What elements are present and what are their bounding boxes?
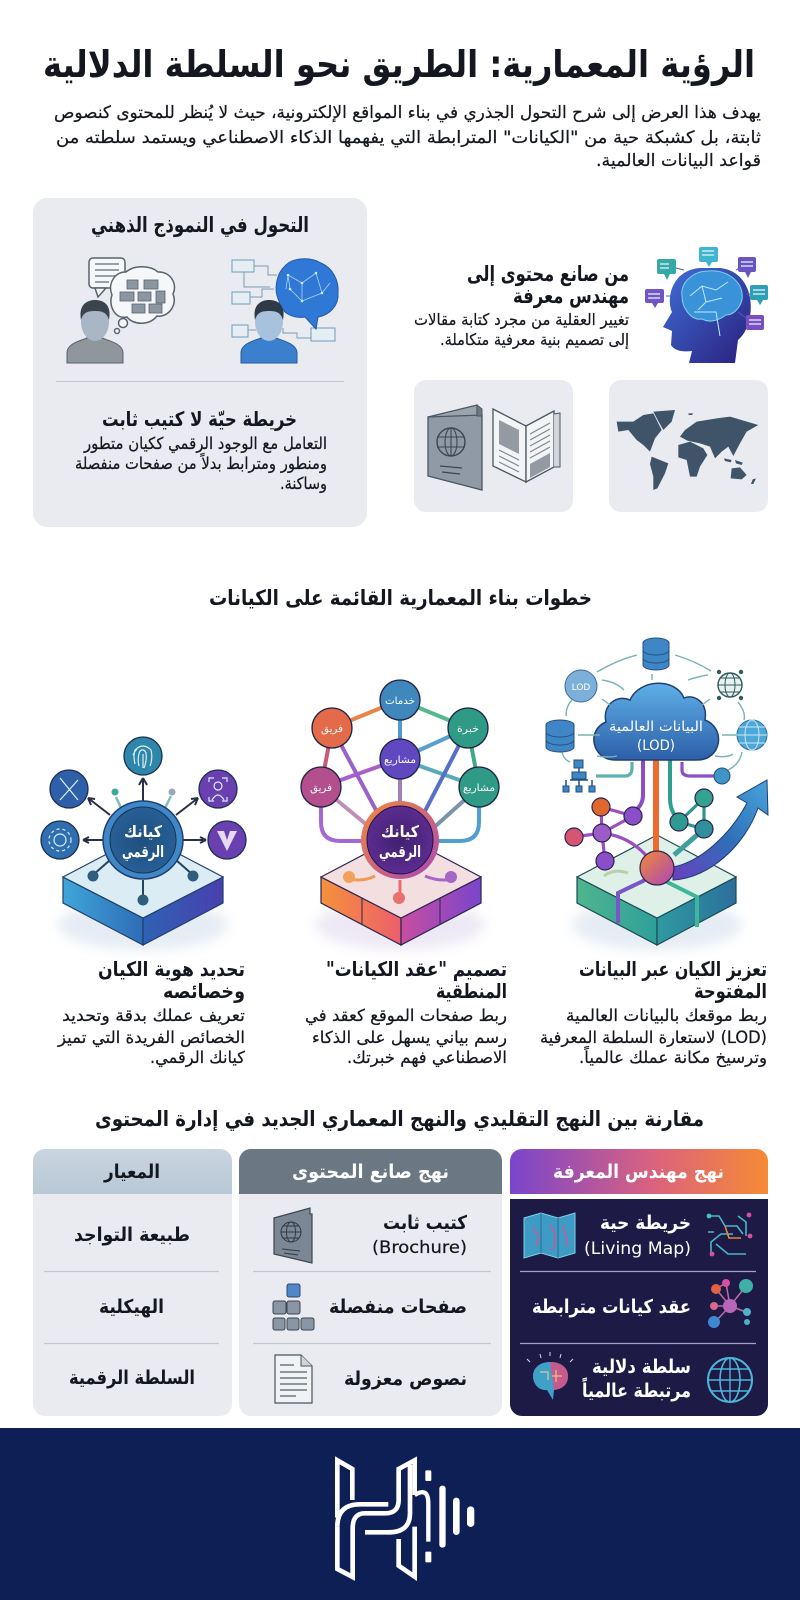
step text: digital identity: الخصائص الفريدة التي تميز bbox=[57, 1028, 245, 1048]
criteria rows bbox=[69, 1224, 195, 1389]
row: semantic authority: سلطة دلالية bbox=[592, 1356, 691, 1378]
platform bbox=[58, 835, 228, 950]
entity core: كيانك bbox=[124, 822, 163, 841]
cloud label: (LOD) bbox=[637, 738, 675, 754]
entity core bbox=[103, 801, 183, 879]
panel: mental model shift bbox=[33, 198, 367, 527]
row: separate pages bbox=[273, 1284, 467, 1330]
panel body text: ومنطور ومترابط بدلاً من صفحات منفصلة bbox=[75, 453, 327, 474]
node links bbox=[321, 700, 479, 841]
panel body text: التعامل مع الوجود الرقمي ككيان متطور bbox=[83, 434, 327, 454]
step illustration: entity nodes: خدمات bbox=[385, 696, 415, 707]
criteria rows: السلطة الرقمية bbox=[69, 1367, 195, 1389]
step illustration: entity nodes: فريق bbox=[321, 724, 343, 735]
text: from content maker to knowledge engineer bbox=[414, 262, 629, 350]
step illustration: open data bbox=[546, 638, 768, 950]
icon: writer with thought blocks bbox=[67, 258, 175, 363]
table column: content maker bbox=[239, 1149, 502, 1416]
step illustration: entity nodes: خبرة bbox=[457, 724, 479, 735]
step text: entity nodes bbox=[305, 957, 507, 1068]
row: living map: (Living Map) bbox=[584, 1239, 691, 1259]
table column: knowledge engineer bbox=[510, 1149, 768, 1416]
data source icons: LOD bbox=[572, 683, 590, 693]
platform bbox=[572, 835, 742, 950]
orbit arrows bbox=[562, 655, 744, 770]
subheading: living map: خريطة حيّة لا كتيب ثابت bbox=[102, 407, 297, 431]
step text: digital identity bbox=[57, 957, 245, 1068]
row: semantic authority bbox=[527, 1352, 752, 1402]
logo bbox=[337, 1460, 474, 1577]
row: isolated texts bbox=[275, 1355, 467, 1403]
card: passport and brochure bbox=[414, 380, 573, 512]
panel heading: التحول في النموذج الذهني bbox=[91, 213, 309, 238]
row: brochure bbox=[274, 1208, 468, 1263]
rising arrow bbox=[673, 780, 768, 880]
row: separate pages: صفحات منفصلة bbox=[329, 1296, 467, 1318]
intro text bbox=[54, 103, 761, 171]
text: from content maker to knowledge engineer: إلى تصميم بنية معرفية متكاملة. bbox=[440, 330, 629, 350]
icon: passport bbox=[428, 405, 482, 490]
step illustration: entity nodes: مشاريع bbox=[463, 783, 495, 794]
intro text: يهدف هذا العرض إلى شرح التحول الجذري في بناء المواقع الإلكترونية، حيث لا يُنظر للمحتوى كنصوص bbox=[54, 103, 761, 123]
row: brochure: (Brochure) bbox=[372, 1238, 467, 1258]
row: linked entity nodes bbox=[532, 1279, 753, 1328]
step text: digital identity: كيانك الرقمي. bbox=[150, 1048, 245, 1068]
step text: entity nodes: رسم بياني يسهل على الذكاء bbox=[312, 1028, 507, 1048]
step text: open data: (LOD) لاستعارة السلطة المعرفية bbox=[540, 1028, 767, 1048]
footer band bbox=[0, 1428, 800, 1600]
labelled nodes bbox=[301, 680, 499, 807]
row: living map bbox=[524, 1212, 752, 1259]
entity core bbox=[361, 801, 439, 879]
text: from content maker to knowledge engineer: مهندس معرفة bbox=[513, 284, 629, 308]
cloud label: البيانات العالمية bbox=[609, 719, 703, 735]
step text: open data: المفتوحة bbox=[694, 979, 767, 1003]
entity core: الرقمي bbox=[379, 842, 421, 862]
row: semantic authority: مرتبطة عالمياً bbox=[582, 1377, 691, 1402]
panel body text: وساكنة. bbox=[280, 474, 327, 494]
column header: نهج صانع المحتوى bbox=[292, 1161, 449, 1183]
intro text: قواعد البيانات العالمية. bbox=[596, 151, 761, 171]
arrows bbox=[83, 778, 206, 843]
panel body text bbox=[75, 434, 327, 494]
satellite icons bbox=[41, 737, 246, 859]
criteria rows: الهيكلية bbox=[99, 1296, 164, 1318]
step illustration: digital identity bbox=[41, 737, 246, 950]
text: from content maker to knowledge engineer: تغيير العقلية من مجرد كتابة مقالات bbox=[414, 310, 629, 330]
intro text: ثابتة، بل كشبكة حية من "الكيانات" المترابطة التي يفهمها الذكاء الاصطناعي ويستمد سلطته من bbox=[56, 128, 761, 148]
cloud bbox=[594, 683, 719, 760]
step text: entity nodes: ربط صفحات الموقع كعقد في bbox=[305, 1006, 507, 1026]
section heading: comparison: مقارنة بين النهج التقليدي والنهج المعماري الجديد في إدارة المحتوى bbox=[95, 1107, 704, 1132]
platform bbox=[315, 835, 485, 950]
icon: brochure bbox=[493, 409, 560, 482]
step text: entity nodes: المنطقية bbox=[436, 979, 507, 1003]
data source icons bbox=[546, 638, 767, 792]
step illustration: entity nodes: فريق bbox=[310, 783, 332, 794]
row: living map: خريطة حية bbox=[600, 1212, 691, 1234]
column header: المعيار bbox=[103, 1161, 160, 1183]
step illustration: entity nodes: مشاريع bbox=[384, 755, 416, 766]
step text: open data: وترسيخ مكانة عملك عالمياً. bbox=[579, 1045, 767, 1068]
step text: digital identity: تحديد هوية الكيان bbox=[98, 957, 245, 981]
icon: head with brain and speech bubbles bbox=[645, 247, 768, 363]
step text: digital identity: وخصائصه bbox=[163, 979, 245, 1003]
step illustration: entity nodes bbox=[301, 680, 499, 950]
entity core: الرقمي bbox=[122, 842, 164, 862]
step text: open data bbox=[540, 957, 767, 1068]
step text: open data: ربط موقعك بالبيانات العالمية bbox=[566, 1006, 767, 1026]
step text: entity nodes: تصميم "عقد الكيانات" bbox=[326, 957, 507, 981]
section heading: steps: خطوات بناء المعمارية القائمة على الكيانات bbox=[209, 586, 592, 610]
connectors bbox=[574, 760, 716, 863]
step text: digital identity: تعريف عملك بدقة وتحديد bbox=[62, 1006, 245, 1026]
row: isolated texts: نصوص معزولة bbox=[344, 1368, 467, 1390]
text: from content maker to knowledge engineer: من صانع محتوى إلى bbox=[467, 262, 629, 286]
card: world map bbox=[609, 380, 768, 512]
graph nodes bbox=[565, 789, 713, 885]
icon: knowledge engineer with brain bbox=[232, 259, 338, 363]
table column: criteria bbox=[33, 1149, 232, 1416]
step text: entity nodes: الاصطناعي فهم خبرتك. bbox=[347, 1048, 507, 1068]
criteria rows: طبيعة التواجد bbox=[74, 1224, 190, 1246]
entity core: كيانك bbox=[381, 822, 420, 841]
row: linked entity nodes: عقد كيانات مترابطة bbox=[532, 1296, 691, 1318]
row: brochure: كتيب ثابت bbox=[383, 1212, 468, 1234]
cloud label bbox=[609, 719, 703, 754]
column header: نهج مهندس المعرفة bbox=[553, 1161, 724, 1183]
